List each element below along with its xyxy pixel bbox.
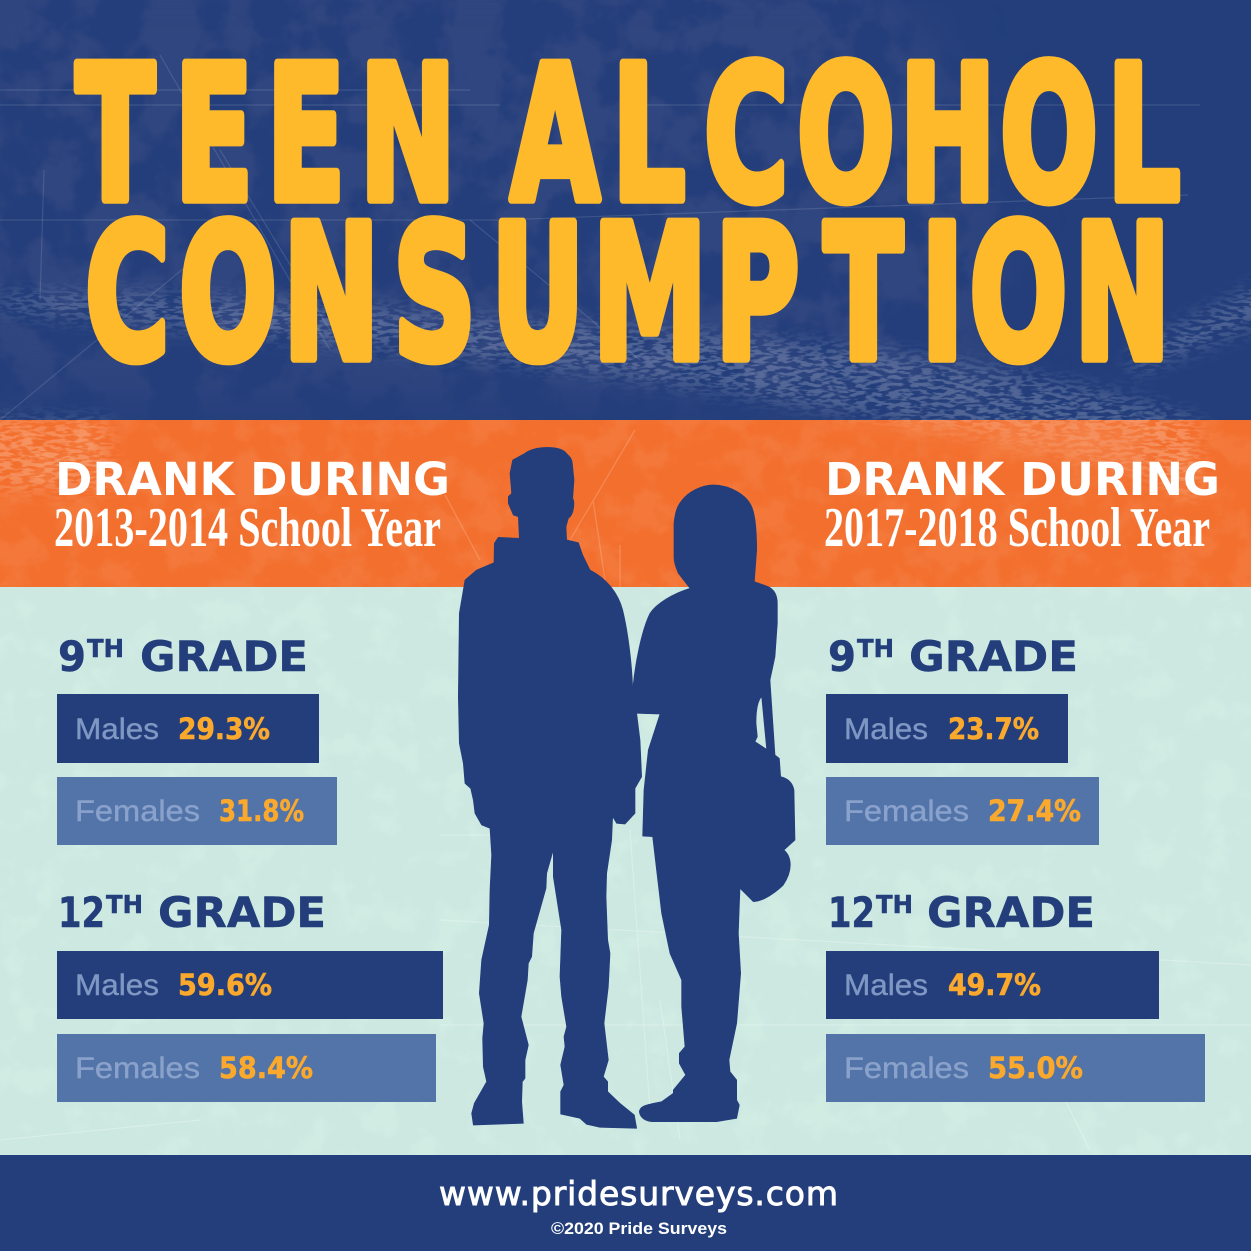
bar: 9th grade females 31.8%: Females <box>75 795 200 828</box>
bar: 12th grade males 59.6% <box>57 951 443 1019</box>
bar: 9th grade males 29.3%: 29.3% <box>178 712 270 746</box>
website url: www.pridesurveys.com <box>439 1174 838 1213</box>
bar: 9th grade females 31.8% <box>57 777 337 845</box>
silhouette: girl with bag <box>633 485 795 1122</box>
bar: 9th grade males 23.7%: 23.7% <box>948 712 1039 746</box>
bar: 12th grade males 49.7%: 49.7% <box>948 968 1041 1002</box>
panel: 2013-2014 school year <box>54 453 450 1102</box>
heading: 9th grade: GRADE <box>140 632 308 681</box>
header background <box>0 0 1251 420</box>
silhouettes of two teens <box>458 447 795 1128</box>
copyright: ©2020 Pride Surveys <box>551 1219 727 1238</box>
bar: 12th grade males 59.6%: 59.6% <box>178 968 272 1002</box>
panel: 2017-2018 school year <box>824 453 1220 1102</box>
mint panel background <box>0 587 1251 1155</box>
heading: 12th grade: 12 <box>58 888 105 937</box>
title <box>76 27 1180 402</box>
orange band background <box>0 420 1251 587</box>
heading: 9th grade: TH <box>87 634 124 663</box>
bar: 9th grade females 31.8%: 31.8% <box>219 794 304 828</box>
heading: 9th grade: GRADE <box>909 632 1078 681</box>
heading: drank during 2013-2014 <box>54 453 450 559</box>
heading: 12th grade: 12 <box>828 888 875 937</box>
heading: 12th grade: TH <box>876 890 913 919</box>
heading: drank during 2017-2018: DRANK DURING <box>825 453 1220 506</box>
bar: 12th grade females 55.0%: 55.0% <box>988 1051 1083 1085</box>
bar: 12th grade females 55.0%: Females <box>844 1052 969 1085</box>
bar: 9th grade males 23.7%: Males <box>844 713 928 746</box>
bar: 12th grade females 58.4%: 58.4% <box>219 1051 313 1085</box>
heading: 9th grade: TH <box>857 634 894 663</box>
bar: 9th grade males 29.3%: Males <box>75 713 159 746</box>
bar: 12th grade males 49.7%: Males <box>844 969 928 1002</box>
title: TEEN ALCOHOL <box>76 27 1180 243</box>
heading: drank during 2017-2018 <box>824 453 1220 559</box>
silhouette: boy <box>458 447 642 1128</box>
bar: 12th grade males 49.7% <box>826 951 1159 1019</box>
heading: 12th grade: GRADE <box>927 888 1095 937</box>
heading: drank during 2013-2014: 2013-2014 School Year <box>54 497 441 559</box>
bar: 9th grade males 23.7% <box>826 694 1068 763</box>
bar: 9th grade males 29.3% <box>57 694 319 763</box>
heading: 9th grade: 9 <box>828 632 856 681</box>
bar: 9th grade females 27.4% <box>826 777 1099 845</box>
heading: 12th grade: GRADE <box>158 888 326 937</box>
title: CONSUMPTION <box>85 186 1170 402</box>
bar: 12th grade females 58.4% <box>57 1034 436 1102</box>
bar: 9th grade females 27.4%: 27.4% <box>988 794 1081 828</box>
heading: 12th grade: TH <box>106 890 143 919</box>
heading: drank during 2013-2014: DRANK DURING <box>55 453 450 506</box>
footer <box>0 1155 1251 1251</box>
heading: 9th grade: 9 <box>58 632 86 681</box>
bar: 12th grade females 55.0% <box>826 1034 1205 1102</box>
bar: 9th grade females 27.4%: Females <box>844 795 969 828</box>
bar: 12th grade females 58.4%: Females <box>75 1052 200 1085</box>
bar: 12th grade males 59.6%: Males <box>75 969 159 1002</box>
